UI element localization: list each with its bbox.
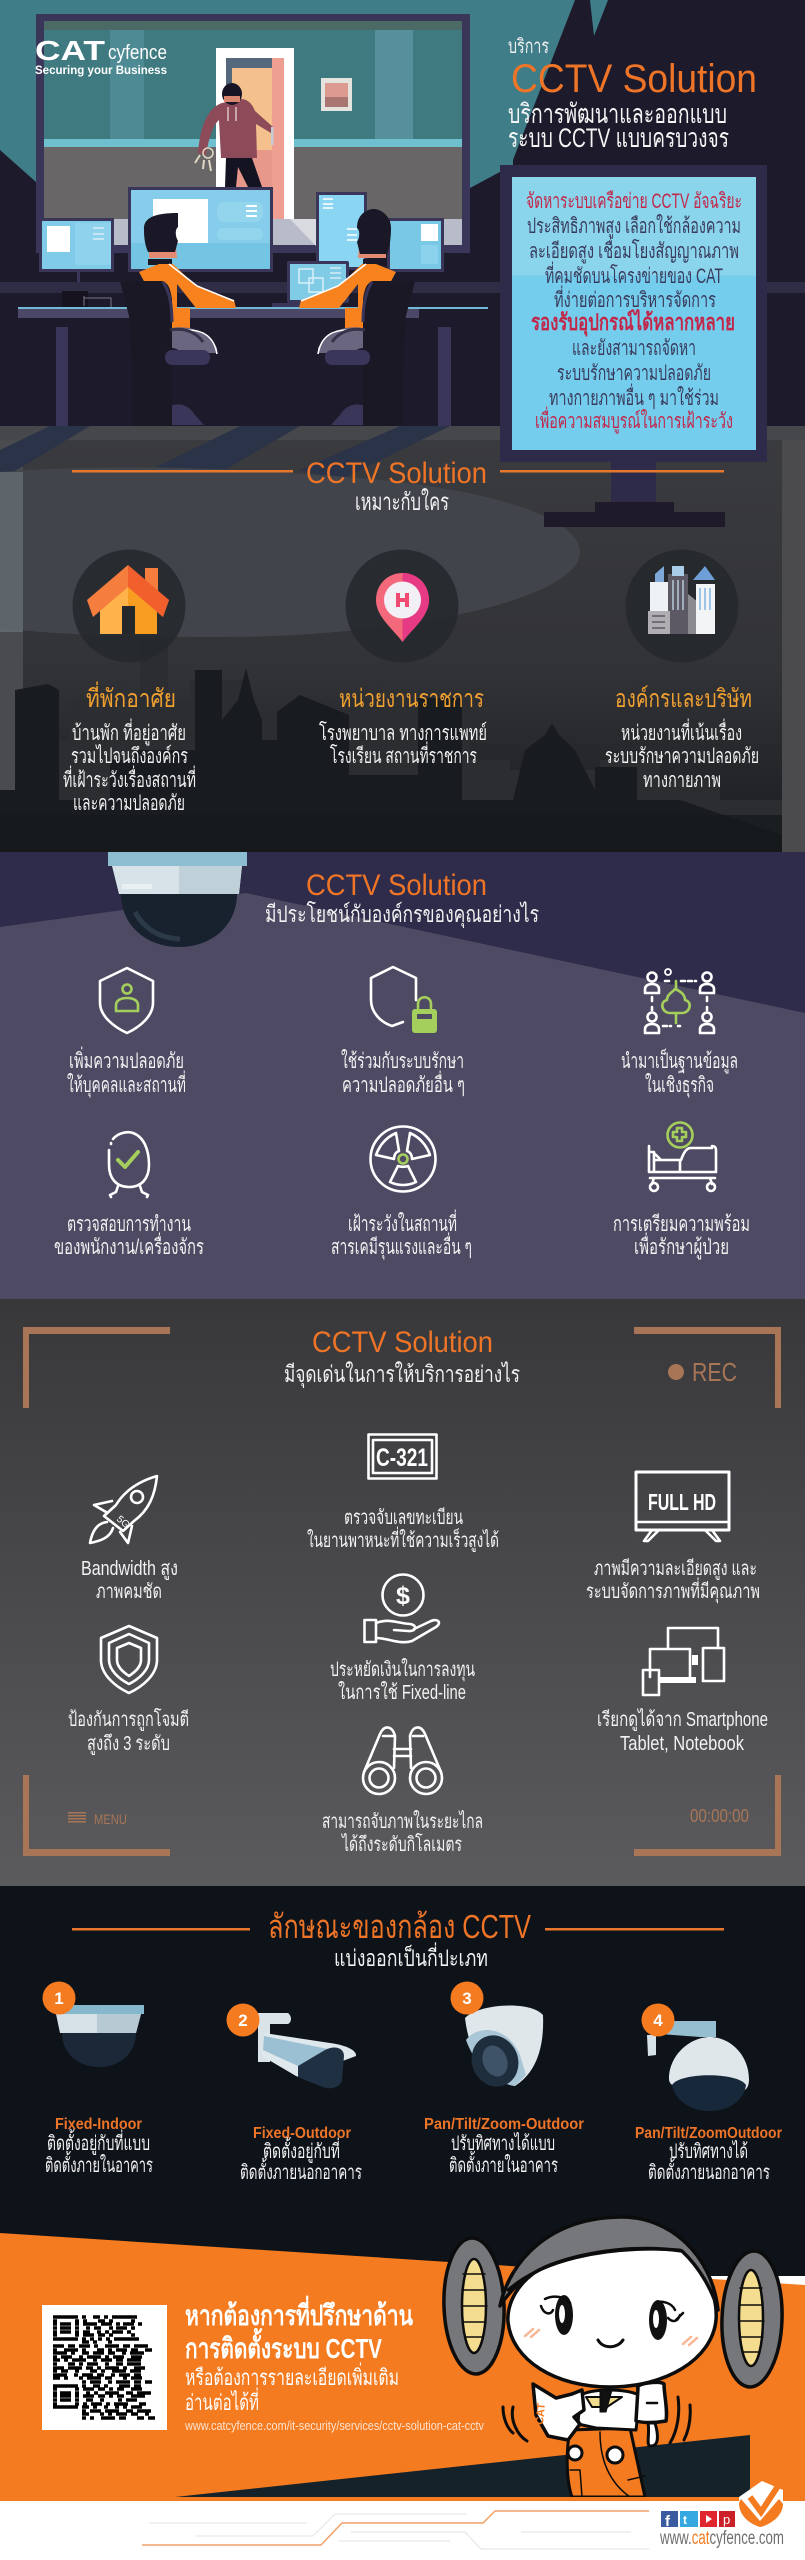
city skyline front <box>0 668 782 852</box>
qr code <box>42 2305 167 2430</box>
benefit: safety <box>67 968 186 1098</box>
column: residence: ที่เฝ้าระวังเรื่องสถานที่ <box>63 765 196 792</box>
info board: ระบบรักษาความปลอดภัย <box>557 362 711 385</box>
icon: house <box>87 565 169 634</box>
desk <box>18 291 488 426</box>
info board: ทางกายภาพอื่น ๆ มาใช้ร่วม <box>549 383 719 410</box>
motion lines <box>503 2397 690 2443</box>
heading: section 4: แบ่งออกเป็นกี่ปะเภท <box>334 1942 488 1971</box>
social icons: f <box>665 2513 671 2530</box>
camera 2 <box>226 2004 362 2184</box>
rec indicator <box>668 1357 737 1387</box>
heading: section 4: ลักษณะของกล้อง CCTV <box>268 1908 531 1945</box>
icon: binoculars <box>363 1727 442 1794</box>
column: residence: และความปลอดภัย <box>73 792 185 815</box>
highlight: saving: ในการใช้ Fixed-line <box>338 1681 466 1704</box>
icon: location pin <box>376 573 429 642</box>
camera viewfinder frame <box>23 1327 781 1856</box>
icon: hospital bed <box>649 1122 716 1191</box>
logo <box>35 35 167 77</box>
heading: section 1: เหมาะกับใคร <box>355 488 449 516</box>
column: residence <box>63 550 196 815</box>
highlight: long range: สามารถจับภาพในระยะไกล <box>322 1810 483 1833</box>
badge 2 <box>226 2004 260 2036</box>
camera 1: ติดตั้งภายในอาคาร <box>45 2151 153 2177</box>
column: residence: บ้านพัก ที่อยู่อาศัย <box>72 718 186 746</box>
badge 1: 1 <box>54 1989 64 2008</box>
operator: right <box>299 209 415 426</box>
info board: รองรับอุปกรณ์ได้หลากหลาย <box>531 308 735 337</box>
badge 4 <box>642 2004 674 2036</box>
benefit: combined systems: ใช้ร่วมกับระบบรักษา <box>341 1049 464 1073</box>
legs overalls <box>567 2428 645 2497</box>
icon: rocket: 5G <box>114 1514 132 1531</box>
shield logo <box>739 2481 783 2527</box>
badge 3 <box>450 1982 484 2014</box>
icon: ptz camera <box>647 2021 749 2111</box>
camera 1: ติดตั้งอยู่กับที่แบบ <box>47 2129 150 2156</box>
highlight: saving <box>330 1574 475 1704</box>
monitor: main <box>128 187 273 272</box>
column: government: หน่วยงานราชการ <box>339 685 484 713</box>
heading: section 1: CCTV Solution <box>306 457 487 490</box>
head <box>508 2247 716 2387</box>
highlight: protection: สูงถึง 3 ระดับ <box>87 1733 170 1756</box>
contact text: อ่านต่อได้ที่ <box>185 2387 259 2415</box>
badge 2: 2 <box>238 2011 248 2030</box>
heading: section 4 <box>72 1908 724 1971</box>
highlight: full hd <box>586 1472 760 1604</box>
highlight: protection: ป้องกันการถูกโจมตี <box>68 1708 189 1732</box>
icon: cloud network <box>645 969 714 1033</box>
highlight: bandwidth: ภาพคมชัด <box>96 1581 162 1603</box>
contact text: การติดตั้งระบบ CCTV <box>185 2327 382 2364</box>
benefit: monitoring <box>54 1132 204 1259</box>
curtain backdrop <box>0 0 575 188</box>
icon: radiation <box>370 1126 436 1192</box>
monitor: back right <box>316 192 367 270</box>
highlight: protection <box>68 1626 189 1756</box>
benefit: hazard: สารเคมีรุนแรงและอื่น ๆ <box>331 1232 472 1260</box>
info board: และยังสามารถจัดหา <box>572 337 696 360</box>
icon: layered shield <box>101 1626 157 1693</box>
ears <box>442 2237 784 2388</box>
column: enterprise: ทางกายภาพ <box>643 769 721 792</box>
benefit: data: นำมาเป็นฐานข้อมูล <box>621 1047 738 1074</box>
benefit: hazard: เฝ้าระวังในสถานที่ <box>348 1209 457 1236</box>
heading: section 2: CCTV Solution <box>306 869 487 902</box>
column: enterprise: หน่วยงานที่เน้นเรื่อง <box>621 718 742 745</box>
mascot: CAT <box>534 2402 548 2425</box>
icon: license plate: C-321 <box>376 1444 428 1472</box>
contact text: www.catcyfence.com/it-security/services/cctv-solution-cat-cctv <box>184 2418 484 2433</box>
badge 3: 3 <box>462 1989 472 2008</box>
heading: section 3: CCTV Solution <box>312 1326 493 1359</box>
heading: section 2 <box>265 869 539 928</box>
benefit: monitoring: ของพนักงาน/เครื่องจักร <box>54 1232 204 1259</box>
monitor: left <box>39 218 114 282</box>
hero title block <box>508 36 757 153</box>
column: enterprise: องค์กรและบริษัท <box>615 685 752 713</box>
panel: hero <box>0 0 805 426</box>
highlight: plate recognition: ในยานพาหนะที่ใช้ความเร็วสูงได้ <box>307 1526 499 1553</box>
column: residence: ที่พักอาศัย <box>86 681 176 713</box>
camera 3 <box>424 1982 584 2177</box>
camera 3: ติดตั้งภายในอาคาร <box>449 2151 558 2177</box>
highlight: bandwidth <box>81 1476 178 1603</box>
social icons: p <box>723 2512 730 2527</box>
badge 1 <box>42 1982 76 2014</box>
laptop <box>272 261 349 307</box>
highlight: multi-device <box>597 1628 768 1755</box>
circuit lines <box>142 2511 649 2549</box>
logo: CAT <box>35 35 105 66</box>
camera 1 <box>42 1982 153 2177</box>
info board <box>500 165 767 462</box>
rec indicator: REC <box>692 1357 737 1387</box>
camera 4: ปรับทิศทางได้ <box>669 2140 748 2163</box>
benefit: patient: การเตรียมความพร้อม <box>613 1213 750 1236</box>
icon: shield person <box>100 968 153 1033</box>
highlight: multi-device: Tablet, Notebook <box>620 1733 745 1755</box>
badge 4: 4 <box>653 2011 663 2030</box>
spotlight beam <box>0 467 580 637</box>
logo: Securing your Business <box>35 65 167 77</box>
social icons <box>661 2511 735 2530</box>
hero title block: บริการพัฒนาและออกแบบ <box>508 99 727 129</box>
hero title block: บริการ <box>508 36 549 58</box>
icon: dome camera indoor <box>56 2005 144 2067</box>
section: contact banner <box>0 2217 805 2501</box>
info board: ที่คมชัดบนโครงข่ายของ CAT <box>545 261 723 288</box>
benefit: monitoring: ตรวจสอบการทำงาน <box>67 1213 191 1236</box>
benefit: data <box>621 969 738 1098</box>
section: footer <box>0 2481 805 2560</box>
camera 1: Fixed-Indoor <box>55 2116 142 2133</box>
benefit: combined systems: ความปลอดภัยอื่น ๆ <box>342 1070 465 1097</box>
icon: bullet camera <box>258 2013 356 2088</box>
heading: section 1 <box>72 457 724 516</box>
stand of info board <box>544 462 725 527</box>
column: government: โรงพยาบาล ทางการแพทย์ <box>319 721 487 745</box>
column: residence: รวมไปจนถึงองค์กร <box>71 744 188 768</box>
timecode: 00:00:00 <box>690 1806 749 1826</box>
helmet <box>500 2217 718 2310</box>
icon: turret camera <box>464 2005 543 2094</box>
door <box>216 48 316 246</box>
menu indicator: MENU <box>94 1811 127 1827</box>
icon: shield lock <box>371 967 437 1033</box>
face <box>555 2295 573 2335</box>
benefit: safety: เพิ่มความปลอดภัย <box>69 1046 184 1073</box>
benefit: combined systems <box>341 967 465 1097</box>
camera 4: Pan/Tilt/ZoomOutdoor <box>635 2125 782 2142</box>
icon: money hand <box>364 1574 439 1642</box>
picture frame <box>321 78 352 111</box>
icon: money hand: $ <box>396 1582 410 1610</box>
section: highlights <box>0 1299 805 1886</box>
camera 3: ปรับทิศทางได้แบบ <box>451 2132 555 2155</box>
column: government: โรงเรียน สถานที่ราชการ <box>330 741 477 768</box>
icon: dome camera <box>108 852 247 947</box>
menu indicator <box>68 1811 127 1827</box>
contact text: หากต้องการที่ปรึกษาด้าน <box>185 2295 413 2331</box>
wall rail <box>0 282 805 293</box>
floor shadows <box>0 426 450 525</box>
thief <box>195 83 274 187</box>
icon: devices <box>643 1628 724 1695</box>
highlight: long range: ได้ถึงระดับกิโลเมตร <box>341 1833 462 1856</box>
shirt and hands <box>578 2390 640 2430</box>
contact text: หรือต้องการรายละเอียดเพิ่มเติม <box>185 2362 399 2390</box>
logo: cyfence <box>108 42 167 64</box>
highlight: plate recognition <box>307 1434 499 1553</box>
benefit: hazard <box>331 1126 472 1260</box>
social icons: t <box>683 2513 687 2527</box>
highlight: bandwidth: Bandwidth สูง <box>81 1558 178 1581</box>
icon: check robot <box>109 1132 149 1197</box>
column: government <box>319 550 487 768</box>
benefit: patient: เพื่อรักษาผู้ป่วย <box>634 1232 729 1260</box>
column: enterprise <box>605 550 759 792</box>
benefit: patient <box>613 1122 750 1260</box>
heading: section 2: มีประโยชน์กับองค์กรของคุณอย่างไร <box>265 901 539 928</box>
info board: ที่ง่ายต่อการบริหารจัดการ <box>554 285 716 312</box>
icon: full hd tv <box>636 1472 729 1541</box>
camera 4 <box>635 2004 782 2184</box>
mascot <box>442 2217 784 2497</box>
operator: left <box>120 213 236 426</box>
section: camera types <box>0 1886 805 2276</box>
heading: section 3 <box>284 1326 520 1388</box>
benefit: data: ในเชิงธุรกิจ <box>645 1073 714 1098</box>
icon: license plate <box>368 1434 436 1478</box>
city skyline back <box>23 640 782 852</box>
benefit: safety: ให้บุคคลและสถานที่ <box>67 1070 186 1098</box>
heading: section 3: มีจุดเด่นในการให้บริการอย่างไร <box>284 1361 520 1388</box>
highlight: saving: ประหยัดเงินในการลงทุน <box>330 1658 475 1682</box>
highlight: plate recognition: ตรวจจับเลขทะเบียน <box>344 1507 463 1529</box>
icon: buildings <box>648 566 715 634</box>
camera 2: ติดตั้งภายนอกอาคาร <box>240 2158 362 2184</box>
icon: full hd tv: FULL HD <box>648 1489 716 1515</box>
section: benefits <box>0 852 805 1299</box>
contact text <box>184 2295 484 2433</box>
window scene <box>36 14 470 253</box>
camera 2: Fixed-Outdoor <box>253 2125 351 2142</box>
monitor: right <box>387 218 444 272</box>
hero title block: CCTV Solution <box>511 57 757 101</box>
camera 2: ติดตั้งอยู่กับที่ <box>263 2137 340 2164</box>
section: who is it for <box>0 426 805 852</box>
highlight: long range <box>322 1727 483 1856</box>
camera 3: Pan/Tilt/Zoom-Outdoor <box>424 2116 584 2133</box>
